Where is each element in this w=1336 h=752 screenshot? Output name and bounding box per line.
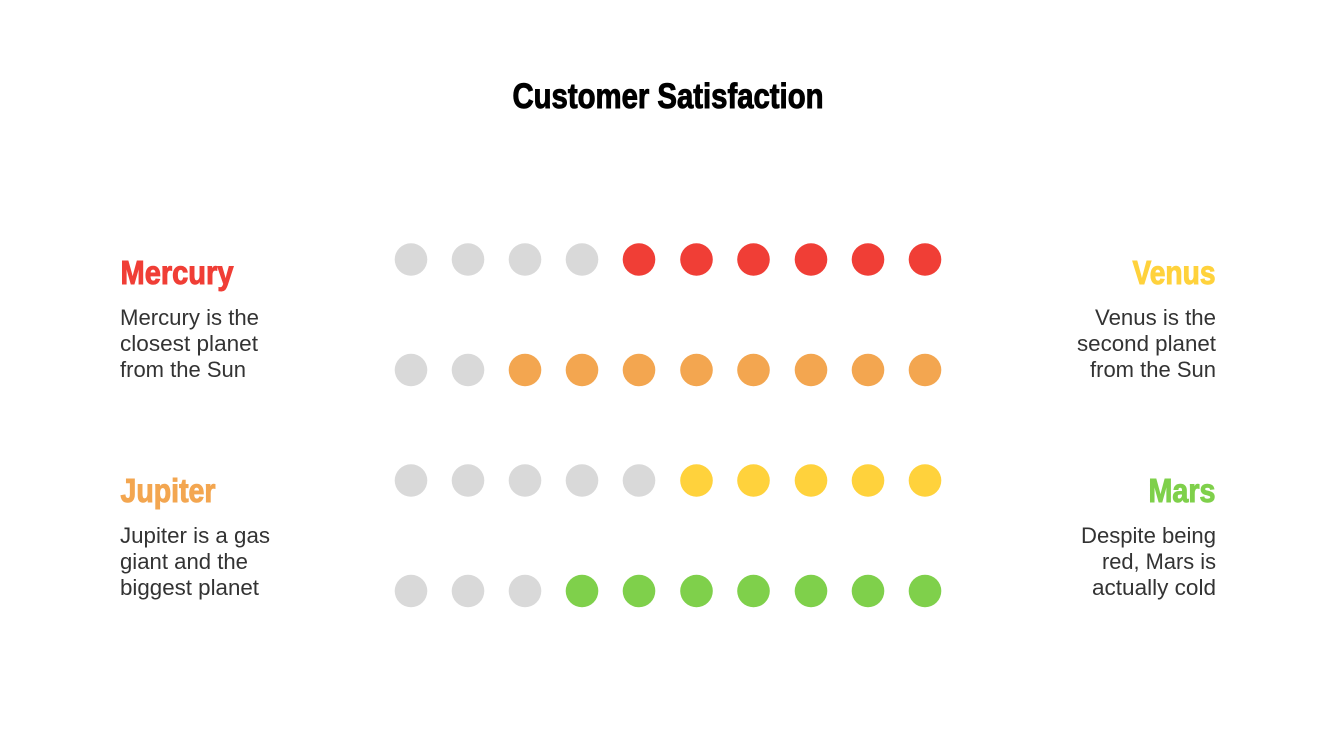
panel: Venus <box>1077 254 1216 382</box>
heading: Mars: Mars <box>1148 472 1216 509</box>
text: Jupiter description: Jupiter is a gas <box>120 523 270 548</box>
panel: Mars <box>1081 472 1216 600</box>
heading: Mercury: Mercury <box>120 254 234 291</box>
dot row: red, 6 of 10 <box>395 243 941 276</box>
text: Jupiter description: biggest planet <box>120 575 259 600</box>
dot row: yellow, 5 of 10 <box>395 464 941 497</box>
text: Venus description <box>1077 305 1216 382</box>
panel: Mercury <box>120 254 259 382</box>
text: Mercury description <box>120 305 259 382</box>
text: Mercury description: closest planet <box>120 331 258 356</box>
text: Jupiter description: giant and the <box>120 549 248 574</box>
text: Venus description: Venus is the <box>1095 305 1216 330</box>
text: Mercury description: Mercury is the <box>120 305 259 330</box>
text: Jupiter description <box>120 523 270 600</box>
text: Mars description: actually cold <box>1092 575 1216 600</box>
text: Mars description: Despite being <box>1081 523 1216 548</box>
heading: Jupiter: Jupiter <box>120 472 216 509</box>
text: Mars description: red, Mars is <box>1102 549 1216 574</box>
panel: Jupiter <box>120 472 270 600</box>
text: Venus description: from the Sun <box>1090 357 1216 382</box>
text: Mercury description: from the Sun <box>120 357 246 382</box>
text: Mars description <box>1081 523 1216 600</box>
text: Venus description: second planet <box>1077 331 1216 356</box>
title: Customer Satisfaction <box>512 77 824 116</box>
dot row: orange, 8 of 10 <box>395 354 941 386</box>
dot row: green, 7 of 10 <box>395 575 941 607</box>
heading: Venus: Venus <box>1132 254 1216 291</box>
